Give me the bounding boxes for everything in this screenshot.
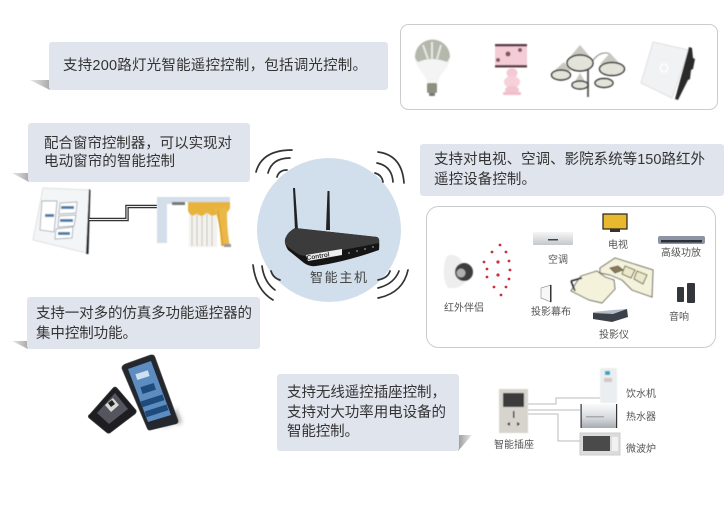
callout: remote control: 集中控制功能。	[36, 325, 137, 342]
icon: curtain wall switch	[33, 188, 90, 254]
callout: lighting control	[30, 42, 388, 90]
icon: smart socket	[499, 389, 528, 433]
callout: wireless socket control	[277, 374, 472, 451]
device labels	[444, 238, 701, 341]
icon: chandelier	[552, 45, 624, 97]
icon: water heater	[580, 404, 617, 428]
device labels: 红外伴侣	[444, 301, 484, 314]
callout: remote control: 支持一对多的仿真多功能遥控器的	[36, 304, 252, 322]
callout: lighting control: 支持200路灯光智能遥控控制，包括调光控制。	[63, 57, 367, 74]
device labels: 高级功放	[661, 246, 701, 259]
callout: curtain control: 电动窗帘的智能控制	[44, 152, 175, 170]
icon: water dispenser	[600, 368, 617, 403]
callout: wireless socket control: 智能控制。	[287, 423, 359, 440]
panel: infrared devices	[426, 206, 716, 348]
icon: LED bulb	[415, 40, 450, 96]
icon: air conditioner	[533, 232, 573, 245]
icon: table lamp	[495, 44, 527, 95]
hub: smart host	[253, 150, 408, 302]
appliance labels: 饮水机	[626, 387, 656, 400]
appliance labels: 热水器	[626, 410, 656, 423]
device labels: 空调	[548, 253, 568, 266]
callout: infrared control: 支持对电视、空调、影院系统等150路红外	[434, 150, 705, 168]
callout: infrared control	[420, 144, 724, 196]
icon: sofa set	[571, 258, 653, 303]
callout: wireless socket control: 支持无线遥控插座控制，	[287, 384, 446, 401]
appliance labels: 微波炉	[626, 442, 656, 455]
callout: curtain control: 配合窗帘控制器，可以实现对	[44, 134, 232, 152]
host label: 智能主机	[310, 270, 367, 285]
icon: router: Control	[306, 251, 330, 262]
callout: curtain control	[12, 123, 250, 182]
icon: projector	[593, 309, 628, 322]
icon: speakers	[677, 283, 695, 303]
icon: wifi waves	[253, 150, 408, 300]
appliance labels	[626, 387, 656, 455]
icon: television	[603, 214, 627, 232]
icon: smartphones	[88, 355, 182, 433]
icon: microwave	[580, 433, 620, 455]
device labels: 电视	[608, 238, 628, 251]
callout: wireless socket control: 支持对大功率用电设备的	[287, 404, 446, 421]
callout: remote control	[12, 297, 260, 349]
panel: lighting devices	[400, 24, 718, 110]
device labels: 音响	[669, 310, 689, 323]
icon: wall light switch	[641, 42, 695, 100]
icon: infrared companion	[444, 255, 473, 288]
wires: socket to appliances	[528, 398, 600, 441]
icon: motorized curtain	[157, 197, 231, 247]
socket label: 智能插座	[494, 438, 534, 451]
icon: amplifier	[658, 236, 705, 244]
wire: switch to curtain	[89, 206, 157, 220]
icon: router	[285, 188, 379, 266]
device labels: 投影幕布	[531, 305, 571, 318]
device labels: 投影仪	[599, 328, 629, 341]
infrared signal dots	[483, 244, 511, 296]
icon: projection screen	[541, 285, 552, 302]
callout: infrared control: 遥控设备控制。	[434, 171, 536, 188]
